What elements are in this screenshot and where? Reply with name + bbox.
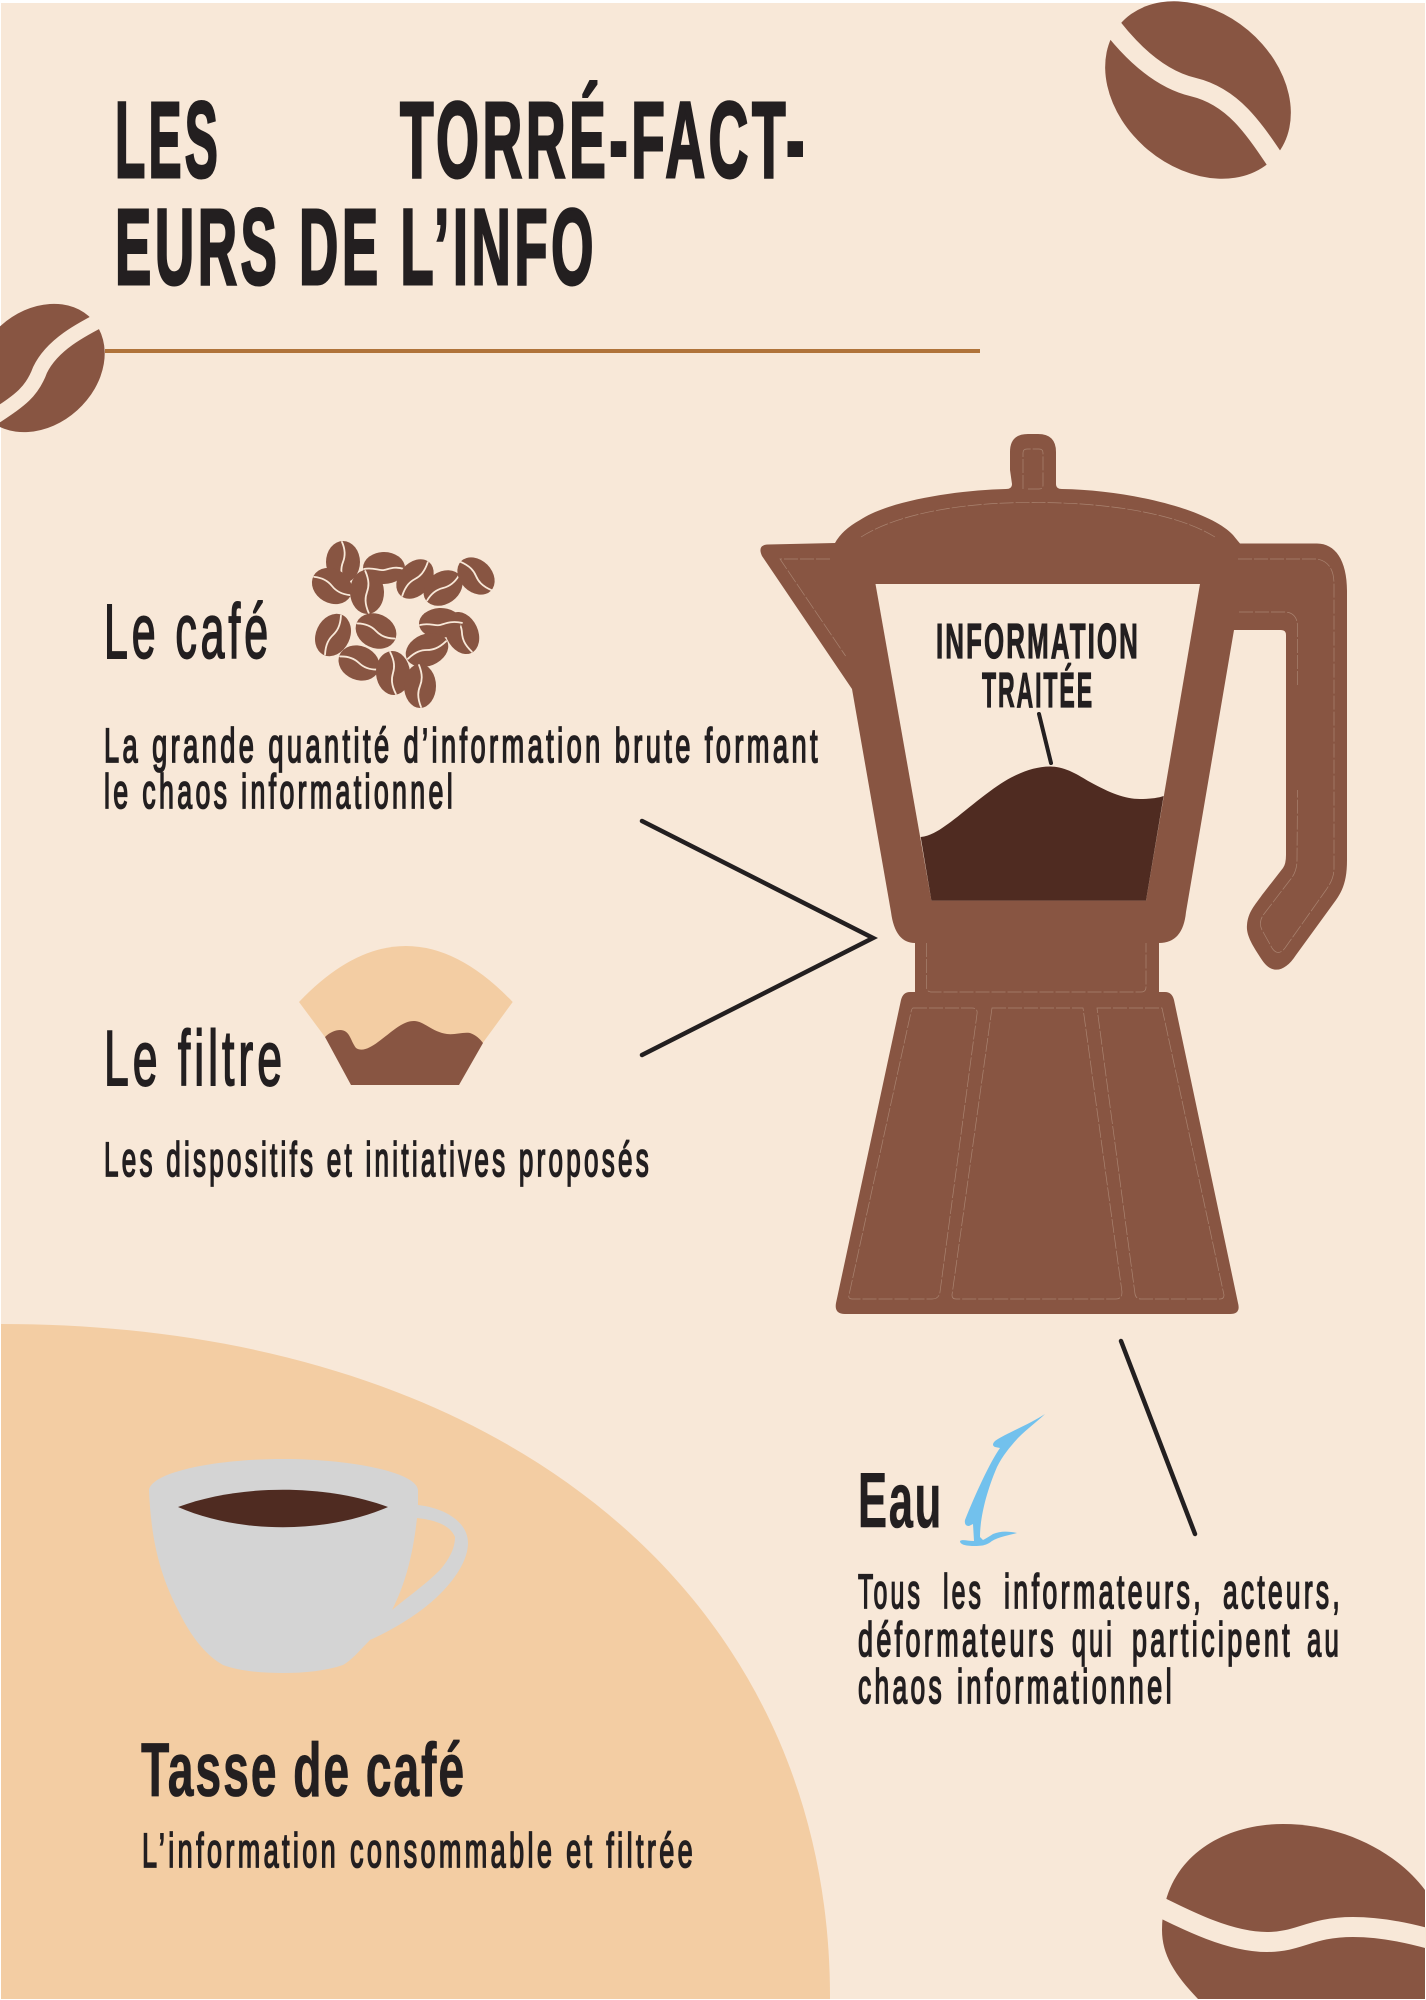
text: le café description — [104, 720, 821, 819]
icon: coffee filter — [299, 946, 513, 1085]
title: LES — [115, 79, 221, 200]
pot seam details — [780, 449, 1334, 1299]
text: eau description — [858, 1566, 1343, 1714]
pointer line — [1039, 714, 1051, 763]
heading: tasse de café: Tasse de café — [141, 1728, 466, 1813]
coffee level — [921, 767, 1164, 901]
coffee surface — [178, 1490, 388, 1527]
text: eau description: au — [1307, 1614, 1342, 1667]
divider line — [105, 349, 980, 353]
icon: blue water brush stroke — [960, 1414, 1045, 1546]
heading: eau: Eau — [858, 1456, 943, 1544]
arrow: line from pot to eau — [1121, 1341, 1195, 1534]
icon: coffee bean top right — [1070, 0, 1326, 215]
arrow: lines from café and filtre to pot — [642, 821, 873, 1055]
heading: le filtre: Le filtre — [104, 1014, 286, 1102]
heading: le café: Le café — [104, 589, 272, 675]
pot window — [876, 584, 1200, 901]
icon: coffee bean bottom right — [1150, 1824, 1426, 1999]
label: information traitée — [936, 615, 1140, 718]
icon: coffee bean left — [0, 277, 131, 459]
text: eau description: qui — [1072, 1614, 1115, 1667]
cup body and handle — [149, 1459, 468, 1673]
text: eau description: déformateurs — [858, 1614, 1057, 1667]
text: tasse de café description: L’information consommable et filtrée — [142, 1825, 696, 1878]
text: eau description: Tous — [858, 1566, 923, 1619]
text: eau description: participent — [1132, 1614, 1293, 1667]
peach table area — [1, 1324, 830, 1999]
text: eau description: informationnel — [957, 1661, 1175, 1714]
text: eau description: informateurs, — [1004, 1566, 1204, 1619]
pot silhouette — [760, 434, 1347, 1314]
text: le filtre description: Les dispositifs et initiatives proposés — [104, 1134, 652, 1187]
icon: coffee cup — [149, 1459, 468, 1673]
moka pot — [760, 434, 1347, 1314]
label: information traitée: TRAITÉE — [982, 664, 1094, 718]
icon: coffee beans cluster — [305, 541, 502, 708]
text: le café description: le chaos informationnel — [104, 766, 456, 819]
text: eau description: chaos — [858, 1661, 945, 1714]
text: eau description: les — [943, 1566, 984, 1619]
text: le café description: La grande quantité d’information brute formant — [104, 720, 821, 773]
title — [115, 79, 808, 307]
title: TORRÉ-FACT- — [400, 79, 808, 200]
title: EURS DE L’INFO — [115, 186, 597, 307]
label: information traitée: INFORMATION — [936, 615, 1140, 669]
